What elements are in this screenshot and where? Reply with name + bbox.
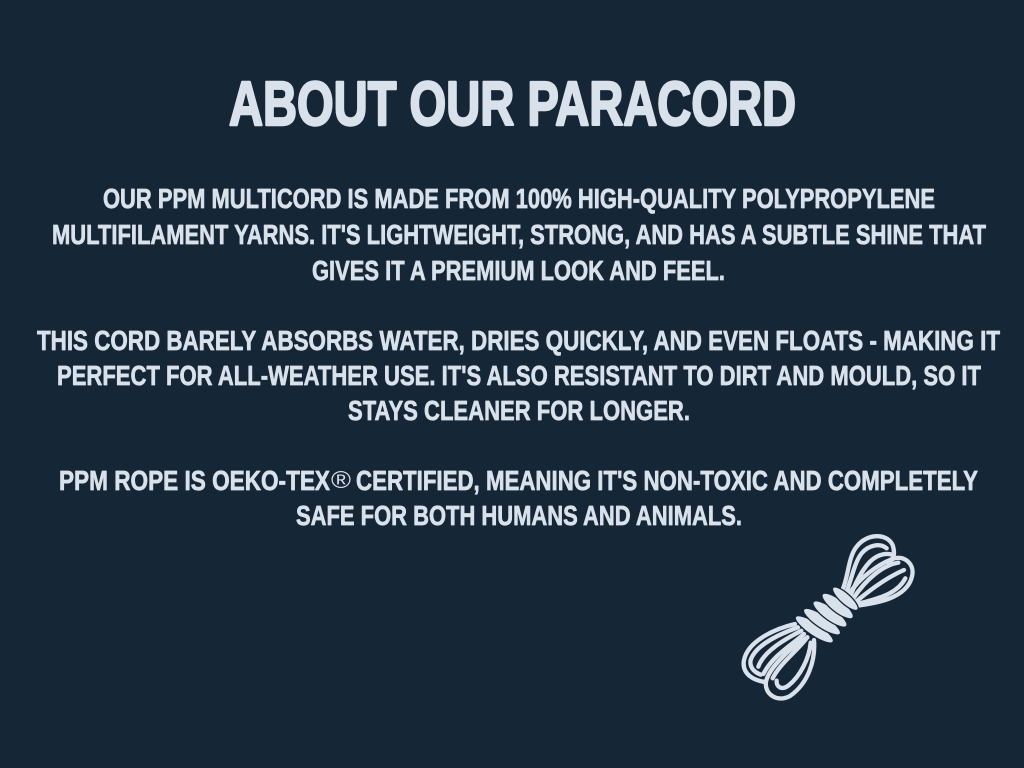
title: ABOUT OUR PARACORD: [229, 70, 796, 139]
text block: certification: PPM ROPE IS OEKO-TEX: [59, 465, 331, 496]
text block: water and dirt resistance: STAYS CLEANER FOR LONGER.: [348, 395, 690, 426]
text block: certification: ®: [331, 467, 351, 494]
text block: certification: SAFE FOR BOTH HUMANS AND ANIMALS.: [296, 500, 742, 531]
icon: coiled rope: [744, 536, 913, 698]
text block: certification: [59, 465, 978, 531]
text block: material description: [52, 183, 986, 286]
text block: water and dirt resistance: [37, 325, 1000, 426]
text block: material description: GIVES IT A PREMIUM LOOK AND FEEL.: [312, 255, 725, 286]
